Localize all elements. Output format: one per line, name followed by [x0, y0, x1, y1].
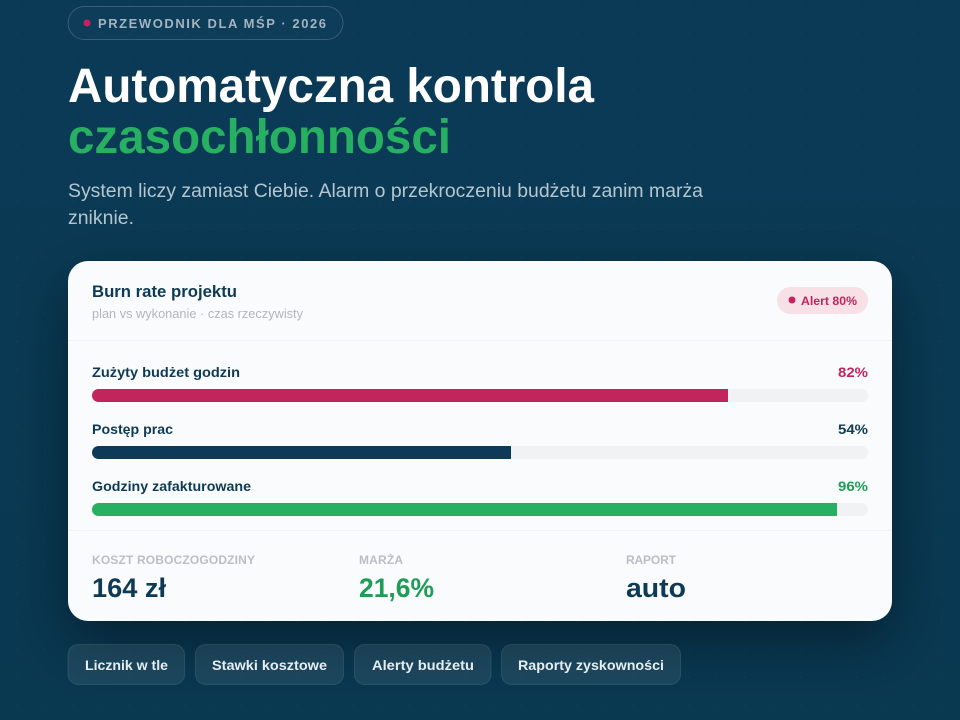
bar: postęp prac: Postęp prac — [92, 421, 173, 437]
chip: stawki kosztowe — [196, 644, 344, 684]
stat: raport: RAPORT — [626, 553, 677, 567]
chip: stawki kosztowe: Stawki kosztowe — [212, 657, 327, 673]
chip: alerty budżetu: Alerty budżetu — [372, 657, 474, 673]
stat: koszt roboczogodziny: 164 zł — [92, 573, 166, 603]
bar: zużyty budżet godzin: Zużyty budżet godzin — [92, 364, 240, 380]
chip: licznik w tle: Licznik w tle — [85, 657, 168, 673]
card heading: plan vs wykonanie · czas rzeczywisty — [92, 307, 304, 321]
alert badge — [777, 287, 868, 314]
bar: postęp prac — [92, 421, 869, 459]
chip: raporty zyskowności — [502, 644, 680, 684]
card heading: Burn rate projektu — [92, 282, 237, 301]
title: czasochłonności — [68, 111, 451, 164]
stat: raport: auto — [626, 573, 686, 603]
bar: zużyty budżet godzin: 82% — [838, 364, 869, 380]
stat: raport — [626, 553, 686, 603]
stat: koszt roboczogodziny: KOSZT ROBOCZOGODZINY — [92, 553, 255, 567]
subtitle — [68, 181, 703, 229]
panel: burn rate card — [68, 261, 892, 641]
title: Automatyczna kontrola — [68, 60, 594, 113]
bar: postęp prac: 54% — [838, 421, 869, 437]
stat: marża — [359, 552, 434, 603]
chip: licznik w tle — [68, 644, 184, 684]
subtitle: System liczy zamiast Ciebie. Alarm o przekroczeniu budżetu zanim marża — [68, 181, 703, 202]
chip: alerty budżetu — [354, 644, 491, 684]
bar: godziny zafakturowane — [92, 478, 869, 516]
title — [68, 60, 594, 164]
bar: godziny zafakturowane: 96% — [838, 478, 869, 494]
eyebrow pill — [68, 6, 343, 40]
chip: raporty zyskowności: Raporty zyskowności — [518, 657, 664, 673]
subtitle: zniknie. — [68, 208, 134, 229]
eyebrow pill: PRZEWODNIK DLA MŚP · 2026 — [98, 16, 326, 31]
card heading — [92, 282, 304, 321]
stat: marża: 21,6% — [359, 573, 434, 603]
bar: godziny zafakturowane: Godziny zafakturowane — [92, 478, 251, 494]
bar: zużyty budżet godzin — [92, 364, 869, 402]
alert badge: Alert 80% — [801, 294, 857, 308]
stat: koszt roboczogodziny — [92, 553, 255, 603]
stat: marża: MARŻA — [359, 552, 403, 567]
